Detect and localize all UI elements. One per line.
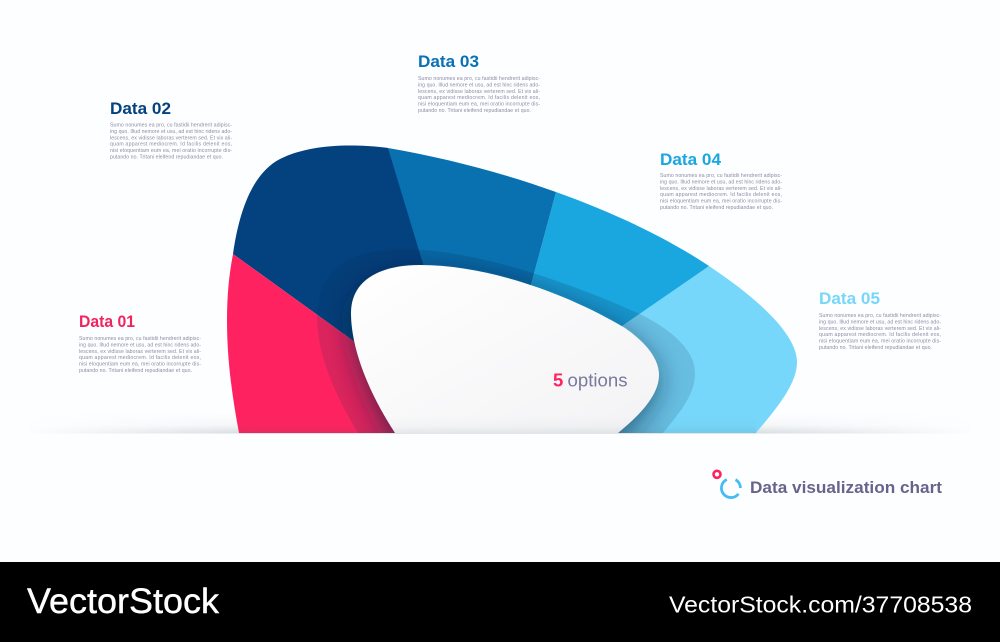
heading: Data 02: Data 02	[110, 99, 171, 118]
paragraph: Data 05: lescens, ex vidisse laboras verterem sed. Et vix ali-	[819, 326, 941, 332]
paragraph: Data 02: lescens, ex vidisse laboras verterem sed. Et vix ali-	[110, 135, 232, 141]
paragraph: Data 01: lescens, ex vidisse laboras verterem sed. Et vix ali-	[79, 349, 201, 355]
paragraph: Data 01: putando no. Tritani eleifend repudiandae et quo.	[79, 368, 192, 374]
text block: Data 04	[660, 150, 782, 211]
segment: Data 01	[227, 254, 395, 433]
centre label: 5 options: 5	[553, 370, 563, 390]
segment: Data 02	[233, 146, 424, 342]
heading: Data 03: Data 03	[418, 52, 479, 71]
paragraph: Data 03: quam apparest mediocrem. Id facilis delenit eos,	[418, 95, 540, 101]
paragraph: Data 04: putando no. Tritani eleifend repudiandae et quo.	[660, 205, 773, 211]
footer bar	[0, 562, 1000, 642]
paragraph: Data 04: quam apparest mediocrem. Id facilis delenit eos,	[660, 192, 782, 198]
paragraph: Data 01: ing quo. Illud nemore et usu, ad est hinc ridens ado-	[79, 342, 201, 348]
donut chart	[227, 146, 797, 433]
paragraph: Data 05: quam apparest mediocrem. Id facilis delenit eos,	[819, 332, 941, 338]
heading: Data 01: Data 01	[79, 312, 135, 331]
text block: Data 03	[418, 52, 540, 114]
text block: Data 01	[79, 312, 201, 374]
paragraph: Data 02: ing quo. Illud nemore et usu, ad est hinc ridens ado-	[110, 129, 232, 135]
paragraph: Data 02: putando no. Tritani eleifend repudiandae et quo.	[110, 154, 223, 160]
paragraph: Data 03: Sumo nonumes ea pro, cu fastidii hendrerit adipisc-	[418, 76, 540, 82]
chart title: Data visualization chart	[750, 478, 942, 497]
text block: Data 05	[819, 289, 941, 351]
paragraph: Data 04: lescens, ex vidisse laboras verterem sed. Et vix ali-	[660, 186, 782, 192]
paragraph: Data 01: nisi eloquentiam eum ea, mei oratio incorrupte dis-	[79, 362, 201, 368]
paragraph: Data 05: ing quo. Illud nemore et usu, ad est hinc ridens ado-	[819, 319, 941, 325]
segment: Data 05	[618, 266, 797, 433]
paragraph: Data 02: quam apparest mediocrem. Id facilis delenit eos,	[110, 142, 232, 148]
paragraph: Data 04: ing quo. Illud nemore et usu, ad est hinc ridens ado-	[660, 179, 782, 185]
paragraph: Data 04: Sumo nonumes ea pro, cu fastidii hendrerit adipisc-	[660, 173, 782, 179]
paragraph: Data 03: lescens, ex vidisse laboras verterem sed. Et vix ali-	[418, 89, 540, 95]
heading: Data 05: Data 05	[819, 289, 880, 308]
paragraph: Data 02: Sumo nonumes ea pro, cu fastidii hendrerit adipisc-	[110, 122, 232, 128]
floor shadow overlay	[239, 415, 756, 434]
inner shadow band	[317, 250, 695, 433]
icon: logo mark	[714, 471, 740, 498]
footer brand: VectorStock	[27, 582, 220, 621]
paragraph: Data 01: Sumo nonumes ea pro, cu fastidii hendrerit adipisc-	[79, 336, 201, 342]
paragraph: Data 03: ing quo. Illud nemore et usu, ad est hinc ridens ado-	[418, 82, 540, 88]
paragraph: Data 02: nisi eloquentiam eum ea, mei oratio incorrupte dis-	[110, 148, 232, 154]
paragraph: Data 05: putando no. Tritani eleifend repudiandae et quo.	[819, 345, 932, 351]
paragraph: Data 04: nisi eloquentiam eum ea, mei oratio incorrupte dis-	[660, 199, 782, 205]
text block: Data 02	[110, 99, 232, 160]
paragraph: Data 05: nisi eloquentiam eum ea, mei oratio incorrupte dis-	[819, 339, 941, 345]
heading: Data 04: Data 04	[660, 150, 722, 169]
floor shadow	[69, 424, 932, 434]
centre white shape	[351, 265, 659, 433]
centre label: 5 options: options	[568, 370, 628, 390]
footer image id: VectorStock.com/37708538	[669, 592, 972, 618]
paragraph: Data 03: putando no. Tritani eleifend repudiandae et quo.	[418, 108, 531, 114]
paragraph: Data 03: nisi eloquentiam eum ea, mei oratio incorrupte dis-	[418, 102, 540, 108]
segment: Data 03	[388, 148, 556, 286]
segment: Data 04	[531, 192, 709, 326]
paragraph: Data 05: Sumo nonumes ea pro, cu fastidii hendrerit adipisc-	[819, 313, 941, 319]
paragraph: Data 01: quam apparest mediocrem. Id facilis delenit eos,	[79, 355, 201, 361]
